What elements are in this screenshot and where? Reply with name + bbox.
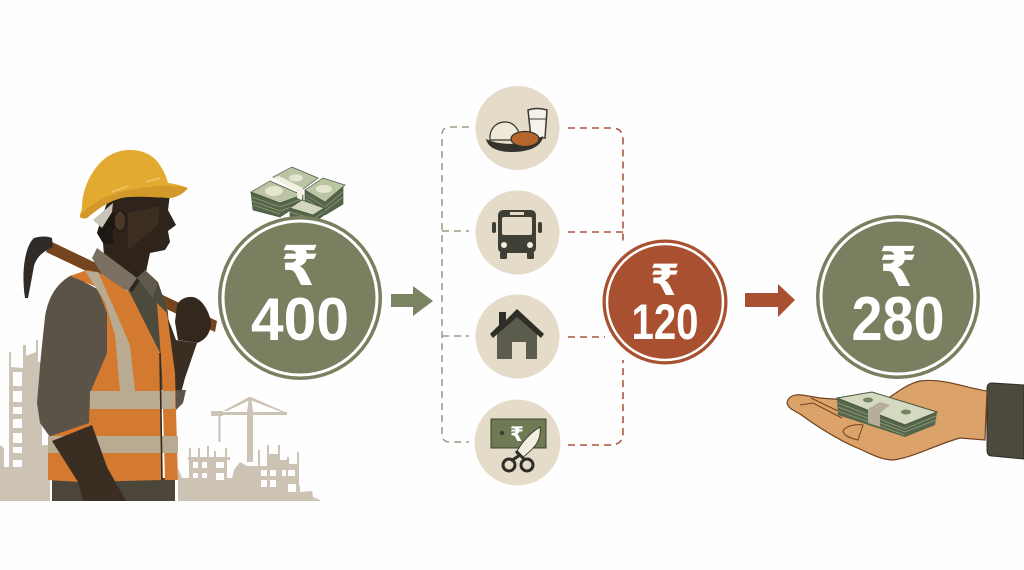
cash stack above 400 xyxy=(251,167,345,224)
hair xyxy=(97,212,118,245)
hand holding cash xyxy=(787,380,1024,460)
left scaffold building xyxy=(0,340,42,501)
left bundle xyxy=(251,192,303,217)
rupee symbol: ₹ xyxy=(650,257,680,305)
hand on handle xyxy=(175,297,211,343)
net wage circle: 280 xyxy=(816,215,980,379)
hard hat xyxy=(80,150,188,218)
right scaffold buildings xyxy=(178,445,320,501)
deduction circle: 120 xyxy=(602,240,728,364)
icon: food plate xyxy=(476,86,560,170)
amount 280: 280 xyxy=(852,285,944,354)
right bundle xyxy=(305,185,343,215)
pants xyxy=(52,478,175,501)
wage circle: 400 xyxy=(218,216,382,380)
forearm xyxy=(52,425,126,501)
rupee symbol: ₹ xyxy=(879,236,917,298)
red dashed bracket xyxy=(568,128,623,445)
face shading xyxy=(128,206,160,250)
back bundle xyxy=(273,167,318,190)
pickaxe xyxy=(23,236,217,332)
ear xyxy=(114,211,126,231)
green dashed bracket xyxy=(442,127,469,442)
tower crane xyxy=(211,397,287,462)
cash on palm xyxy=(837,392,937,437)
icon: house xyxy=(476,294,560,378)
worker figure xyxy=(23,150,217,501)
right sleeve xyxy=(172,390,186,410)
shirt torso and left sleeve xyxy=(37,275,110,437)
front bundle xyxy=(290,208,324,224)
sleeve xyxy=(987,383,1024,459)
icon: cut note with scissors xyxy=(474,400,560,486)
neck and head xyxy=(97,194,176,292)
safety vest xyxy=(48,270,178,482)
arrow: red xyxy=(745,284,795,317)
right arm xyxy=(165,310,197,408)
amount 400: 400 xyxy=(251,286,349,353)
rupee symbol: ₹ xyxy=(281,235,319,297)
finger lines xyxy=(800,398,863,440)
construction skyline background xyxy=(0,340,320,501)
shirt collar xyxy=(92,248,158,298)
hat liner xyxy=(93,203,113,228)
arrow: green xyxy=(391,286,433,316)
hand xyxy=(787,380,987,460)
icon: cut note with scissors: ₹ xyxy=(510,424,524,446)
icon: bus xyxy=(476,190,560,274)
amount 120: 120 xyxy=(632,294,698,350)
paper band xyxy=(273,176,303,200)
